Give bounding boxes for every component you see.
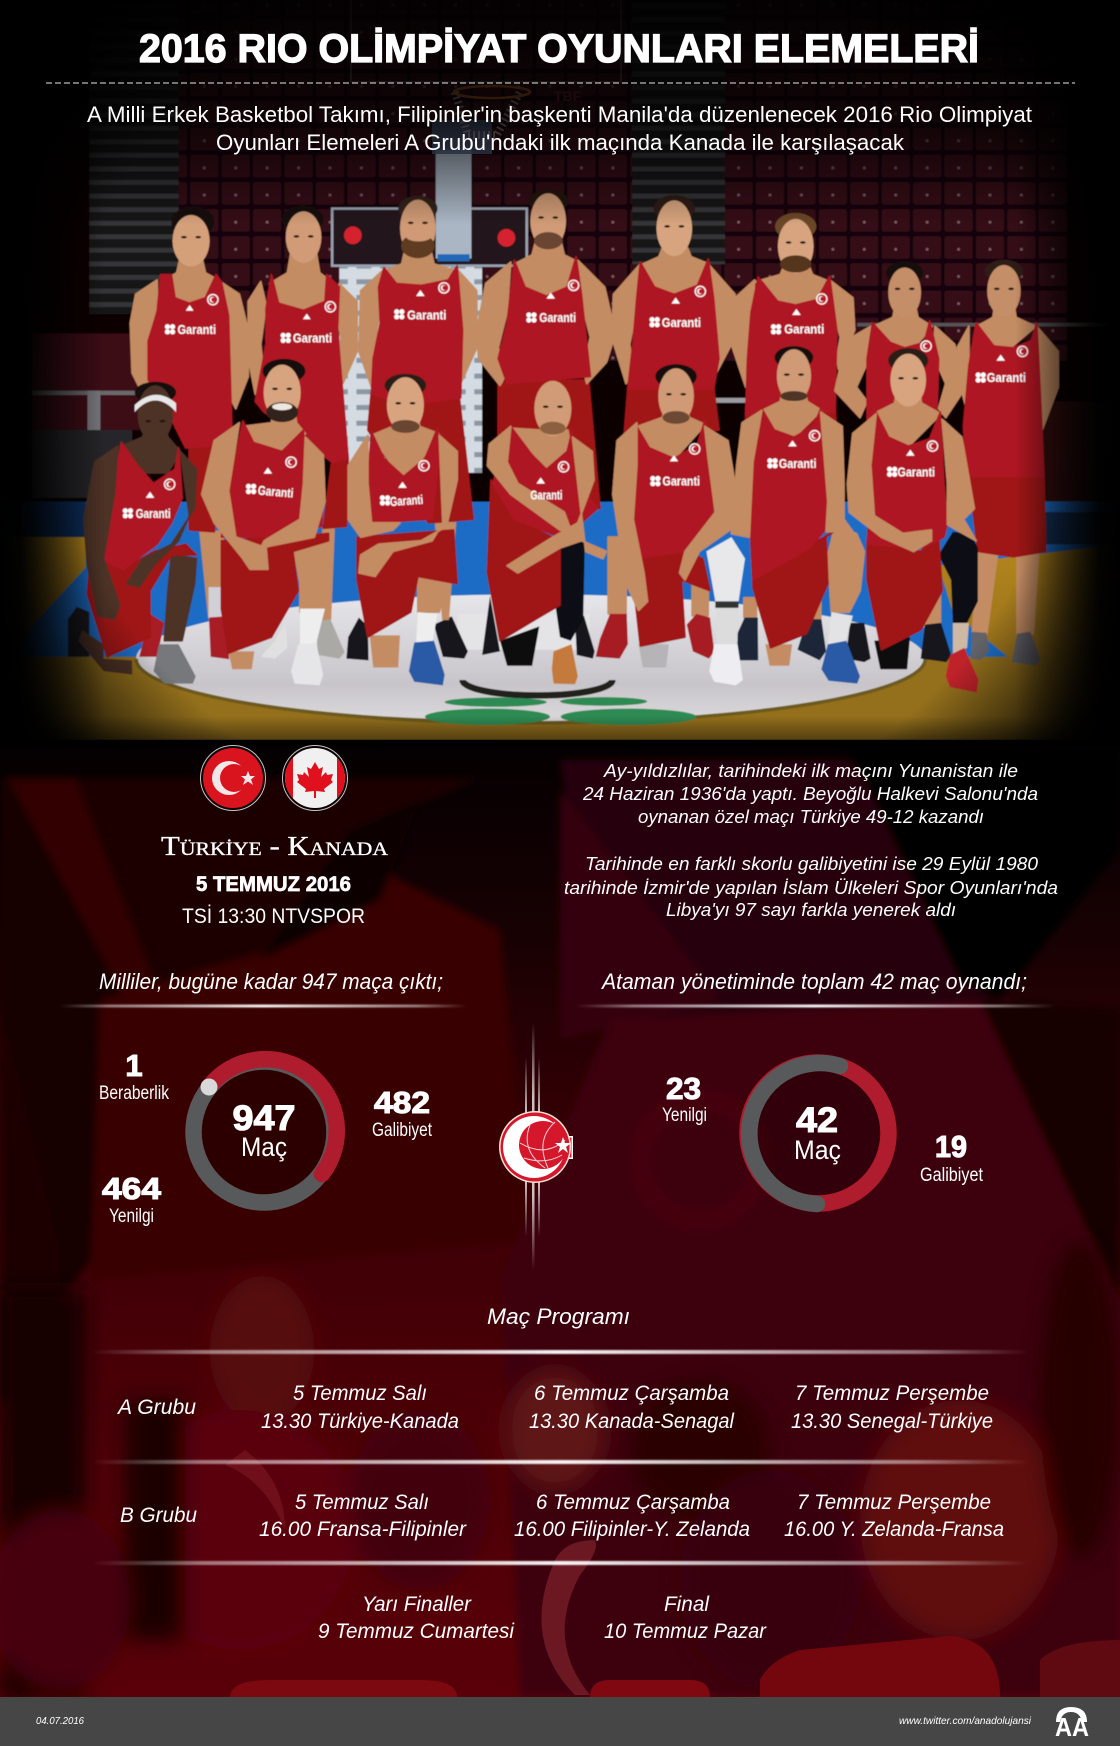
stat: losses 464 [102,1171,162,1227]
player front row 7 [847,348,979,692]
history text: 24 Haziran 1936'da yaptı. Beyoğlu Halkevi Salonu'nda [582,783,1038,804]
player back row 4 [477,190,615,659]
stat: wins 482: Galibiyet [372,1120,433,1141]
player back row 2: Garanti [293,330,332,345]
team photo [0,0,1120,746]
schedule: finals: Final [664,1593,710,1616]
match heading [161,831,388,928]
schedule: group A [116,1382,993,1433]
hoop and net behind heading: TBF [554,88,582,104]
icon: AA logo: AA [1055,1712,1089,1742]
schedule: group B [120,1491,1004,1541]
schedule: group A: 13.30 Senegal-Türkiye [791,1410,993,1433]
stat: losses 23: Yenilgi [662,1105,707,1126]
player back row 2 [248,206,357,659]
schedule: finals: 9 Temmuz Cumartesi [318,1620,515,1643]
player front row 5: Garanti [662,473,700,488]
schedule: group A: 13.30 Türkiye-Kanada [261,1410,459,1433]
stat: losses 464: Yenilgi [109,1206,154,1227]
left stats heading: Milliler, bugüne kadar 947 maça çıktı; [99,969,443,994]
player front row 4: Garanti [530,488,562,503]
player back row 5: Garanti [662,315,701,330]
match heading: Türkiye - Kanada [161,831,388,861]
stat: losses 464: 464 [102,1171,162,1206]
history text: Tarihinde en farklı skorlu galibiyetini ise 29 Eylül 1980 [585,853,1039,874]
schedule heading: Maç Programı [487,1304,630,1329]
history text: tarihinde İzmir'de yapılan İslam Ülkeleri Spor Oyunları'nda [564,877,1058,898]
stat: draws: 1 [125,1048,143,1083]
backboard and ad board [332,150,527,473]
schedule: group B: 16.00 Y. Zelanda-Fransa [784,1518,1004,1541]
player front row 6: Garanti [779,456,816,471]
player back row 4: Garanti [539,310,576,325]
stat: draws [99,1048,169,1104]
crowd silhouettes [0,1240,1120,1700]
stat: wins 19: 19 [935,1129,967,1164]
hoop and net behind heading [350,30,622,154]
icon: Canada flag [282,746,348,810]
flag crescents and seats [225,1450,1120,1697]
match heading: 5 TEMMUZ 2016 [196,872,351,896]
icon: Turkey flag [200,746,266,810]
schedule: group B: 7 Temmuz Perşembe [797,1491,991,1514]
stat: wins 482 [372,1085,433,1141]
schedule: finals: Yarı Finaller [362,1593,472,1616]
history text: Libya'yı 97 sayı farkla yenerek aldı [666,899,956,920]
schedule: finals: 10 Temmuz Pazar [604,1620,767,1643]
stat: wins 482: 482 [374,1085,430,1120]
floor [0,501,1120,740]
player back row 1 [130,206,248,659]
player front row 6 [731,346,864,684]
dashed divider [46,82,1075,84]
player front row 1: Garanti [136,506,171,521]
lower red flag background [0,746,1120,1700]
player front row 5 [613,364,745,685]
player back row 8 [957,260,1058,666]
player front row 1 [68,382,196,684]
schedule: group A: 5 Temmuz Salı [293,1382,427,1405]
stat: losses 23 [662,1071,707,1126]
player back row 1: Garanti [177,322,216,337]
stat: losses 23: 23 [666,1071,701,1106]
player front row 7: Garanti [897,464,935,479]
schedule: group B: 16.00 Fransa-Filipinler [259,1518,467,1541]
left donut chart: Maç [241,1132,287,1162]
schedule: finals [318,1593,767,1643]
player front row 3 [348,374,457,685]
player back row 6 [731,213,855,660]
player back row 5 [596,195,735,659]
history text [564,760,1058,920]
schedule: group B: 6 Temmuz Çarşamba [536,1491,730,1514]
heading: 2016 RIO OLİMPİYAT OYUNLARI ELEMELERİ [139,27,979,71]
player back row 8: Garanti [987,370,1026,385]
left donut chart [194,1059,337,1202]
intro text: Oyunları Elemeleri A Grubu'ndaki ilk maçında Kanada ile karşılaşacak [216,130,905,155]
twitter address: www.twitter.com/anadolujansi [899,1715,1032,1727]
intro text: A Milli Erkek Basketbol Takımı, Filipinler'in başkenti Manila'da düzenlenecek 2016 Rio Olimpiyat [87,102,1032,127]
schedule: group B: 5 Temmuz Salı [295,1491,429,1514]
player front row 4 [487,381,606,684]
player back row 6: Garanti [784,322,824,337]
player back row 7 [835,261,964,662]
match heading: TSİ 13:30 NTVSPOR [182,905,365,928]
intro text [87,102,1032,155]
stat: wins 19 [920,1129,984,1186]
right stats heading: Ataman yönetiminde toplam 42 maç oynandı; [600,969,1027,994]
player front row 3: Garanti [389,492,424,509]
right donut chart [748,1062,888,1204]
player back row 3 [346,196,477,660]
player back row 3: Garanti [407,308,446,323]
player front row 2 [202,359,329,685]
player front row 2: Garanti [257,483,294,501]
history text: oynanan özel maçı Türkiye 49-12 kazandı [638,806,984,827]
schedule: group A: 13.30 Kanada-Senagal [529,1410,735,1433]
stat: wins 19: Galibiyet [920,1165,984,1186]
schedule: group B: 16.00 Filipinler-Y. Zelanda [514,1518,750,1541]
flag folds [0,748,1120,1696]
left donut chart: 947 [232,1099,296,1138]
center federation logo [499,1023,573,1270]
schedule: group A: 7 Temmuz Perşembe [795,1382,989,1405]
footer [0,1697,1120,1746]
stat: draws: Beraberlik [99,1083,169,1104]
date: 04.07.2016 [36,1715,84,1727]
history text: Ay-yıldızlılar, tarihindeki ilk maçını Yunanistan ile [603,760,1018,781]
schedule: group B: B Grubu [120,1504,197,1527]
arena stands [0,0,1120,509]
right donut chart: Maç [794,1135,841,1165]
right donut chart: 42 [796,1101,838,1140]
schedule: group A: 6 Temmuz Çarşamba [534,1382,729,1405]
photo vignette [0,0,1120,746]
schedule: group A: A Grubu [116,1396,196,1419]
